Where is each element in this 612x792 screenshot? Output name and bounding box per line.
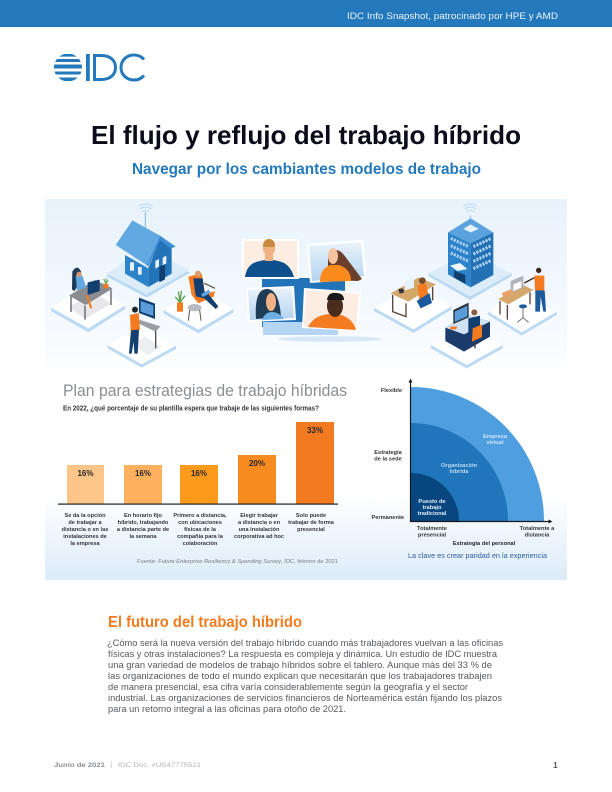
section heading: El futuro del trabajo híbrido bbox=[108, 614, 302, 631]
chart heading: Plan para estrategias de trabajo híbridas bbox=[63, 382, 347, 400]
bar label 5: Solo puede bbox=[296, 513, 326, 519]
standing man presenting at desk bbox=[488, 268, 557, 336]
arc label: Puesto de trabajo tradicional: tradicional bbox=[418, 511, 447, 517]
panel background bbox=[45, 199, 567, 580]
body paragraph: de manera presencial, esa cifra varía considerablemente según la geografía y el sector bbox=[108, 682, 468, 692]
desk with man at bottom bbox=[431, 303, 503, 368]
diagram caption: La clave es crear paridad en la experiencia bbox=[408, 553, 547, 560]
subtitle: Navegar por los cambiantes modelos de trabajo bbox=[132, 161, 481, 178]
bar label 4: una instalación bbox=[239, 527, 280, 533]
axis label: Totalmente presencial: Totalmente bbox=[417, 526, 447, 532]
axis label: Estrategia de la sede: de la sede bbox=[374, 456, 402, 462]
body paragraph: ¿Cómo será la nueva versión del trabajo híbrido cuando más trabajadores vuelvan a las oficinas bbox=[107, 638, 503, 648]
house on platform bbox=[106, 204, 190, 298]
body paragraph: una gran variedad de modelos de trabajo híbridos sobre el tablero. Aunque más del 33 % de bbox=[108, 660, 492, 670]
bar: 16% bbox=[180, 465, 218, 504]
IDC logo bbox=[54, 54, 144, 81]
body paragraph: físicas y otras instalaciones? La respuesta es compleja y dinámica. Un estudio de IDC muestra bbox=[108, 649, 498, 659]
desk with woman in blue chair bbox=[374, 277, 452, 333]
video card: man in orange bbox=[302, 288, 361, 331]
bar label 1: distancia o en las bbox=[62, 527, 108, 533]
bar label 4: Elegir trabajar bbox=[240, 513, 279, 519]
bar label 3: compañía para la bbox=[177, 534, 224, 540]
chart source: Fuente: Future Enterprise Resiliency & Spending Survey, IDC, febrero de 2021 bbox=[137, 559, 338, 565]
section: future of hybrid work bbox=[107, 614, 503, 714]
arc label: Organización híbrida: híbrida bbox=[450, 469, 469, 475]
building on platform bbox=[428, 204, 512, 300]
illustration: hybrid work scenes bbox=[51, 204, 557, 368]
bar: 20%: 20% bbox=[249, 459, 265, 468]
bar: 16%: 16% bbox=[135, 469, 151, 478]
left desk: woman at computer bbox=[51, 268, 125, 332]
body paragraph: industrial. Las organizaciones de servicios financieros de Norteamérica están fijando los plazos bbox=[108, 693, 502, 703]
bar label 5: presencial bbox=[297, 527, 325, 533]
bar: 33% bbox=[296, 422, 334, 504]
bar label 1: la empresa bbox=[70, 541, 101, 547]
footer bbox=[54, 760, 558, 770]
bar label 5: trabajar de forma bbox=[288, 520, 335, 526]
arc label: Empresa virtual: Empresa bbox=[483, 434, 508, 440]
bar: 16%: 16% bbox=[191, 469, 207, 478]
bar label 2: la semana bbox=[129, 534, 157, 540]
video card: man in navy bbox=[242, 239, 299, 279]
outer arc: virtual company bbox=[411, 387, 544, 521]
axis label: Flexible: Flexible bbox=[381, 388, 402, 394]
bottom left: standing man at desk bbox=[108, 298, 176, 368]
inner arc: traditional workplace bbox=[411, 473, 459, 521]
bar: 16% bbox=[124, 465, 162, 504]
video card: woman with dark hair bbox=[246, 286, 296, 322]
bar: 33%: 33% bbox=[307, 426, 323, 435]
axis label: Totalmente a distancia: distancia bbox=[525, 532, 550, 538]
footer: 1 bbox=[553, 760, 558, 770]
video card: woman with long brown hair bbox=[307, 240, 367, 283]
footer: IDC Doc. #US47775521 bbox=[118, 762, 201, 769]
footer: Junio de 2021 bbox=[54, 762, 105, 769]
middle arc: hybrid organization bbox=[411, 423, 508, 521]
bar chart panel bbox=[58, 382, 347, 565]
body paragraph: para un retorno integral a las oficinas para otoño de 2021. bbox=[108, 704, 346, 714]
bar label 1: de trabajar a bbox=[68, 520, 103, 526]
axis title: Estrategia del personal: Estrategia del personal bbox=[453, 541, 516, 547]
video call collage bbox=[242, 239, 382, 342]
bar label 3: físicas de la bbox=[184, 527, 217, 533]
bar: 20% bbox=[238, 455, 276, 504]
bar label 1: Se da la opción bbox=[64, 513, 106, 519]
body paragraph: las organizaciones de todo el mundo explican que necesitarán que los trabajadores trabajen bbox=[108, 671, 492, 681]
bar label 3: con ubicaciones bbox=[178, 520, 222, 526]
arc label: Organización híbrida: Organización bbox=[441, 463, 478, 469]
axis label: Totalmente presencial: presencial bbox=[418, 532, 446, 538]
monitor bbox=[262, 278, 345, 327]
bar label 3: Primero a distancia, bbox=[173, 513, 227, 519]
body paragraph bbox=[107, 638, 503, 714]
bar: 16% bbox=[67, 465, 104, 504]
arc label: Empresa virtual: virtual bbox=[486, 440, 504, 446]
top banner: IDC Info Snapshot, patrocinado por HPE y AMD bbox=[347, 11, 558, 21]
quadrant arc diagram bbox=[371, 378, 555, 560]
bar label 2: a distancia parte de bbox=[117, 527, 169, 533]
bar label 1: instalaciones de bbox=[63, 534, 107, 540]
bar: 16%: 16% bbox=[77, 469, 94, 478]
axis label: Totalmente a distancia: Totalmente a bbox=[520, 526, 555, 532]
bar label 3: colaboración bbox=[183, 541, 218, 547]
bar label 4: a distancia o en bbox=[238, 520, 281, 526]
arc label: Puesto de trabajo tradicional: trabajo bbox=[423, 505, 442, 511]
bar label 4: corporativa ad hoc bbox=[234, 534, 284, 540]
bar label 2: híbrido, trabajando bbox=[118, 520, 169, 526]
top banner bbox=[0, 0, 612, 27]
axis label: Permanente: Permanente bbox=[371, 515, 404, 521]
title: El flujo y reflujo del trabajo híbrido bbox=[91, 120, 521, 150]
right: man in orange armchair bbox=[163, 271, 233, 333]
bar label 2: En horario fijo bbox=[124, 513, 163, 519]
axes with arrows bbox=[410, 381, 551, 522]
chart question: En 2022, ¿qué porcentaje de su plantilla espera que trabaje de las siguientes formas? bbox=[63, 406, 319, 412]
arc label: Puesto de trabajo tradicional: Puesto de bbox=[418, 499, 446, 505]
axis label: Estrategia de la sede: Estrategia bbox=[374, 450, 403, 456]
